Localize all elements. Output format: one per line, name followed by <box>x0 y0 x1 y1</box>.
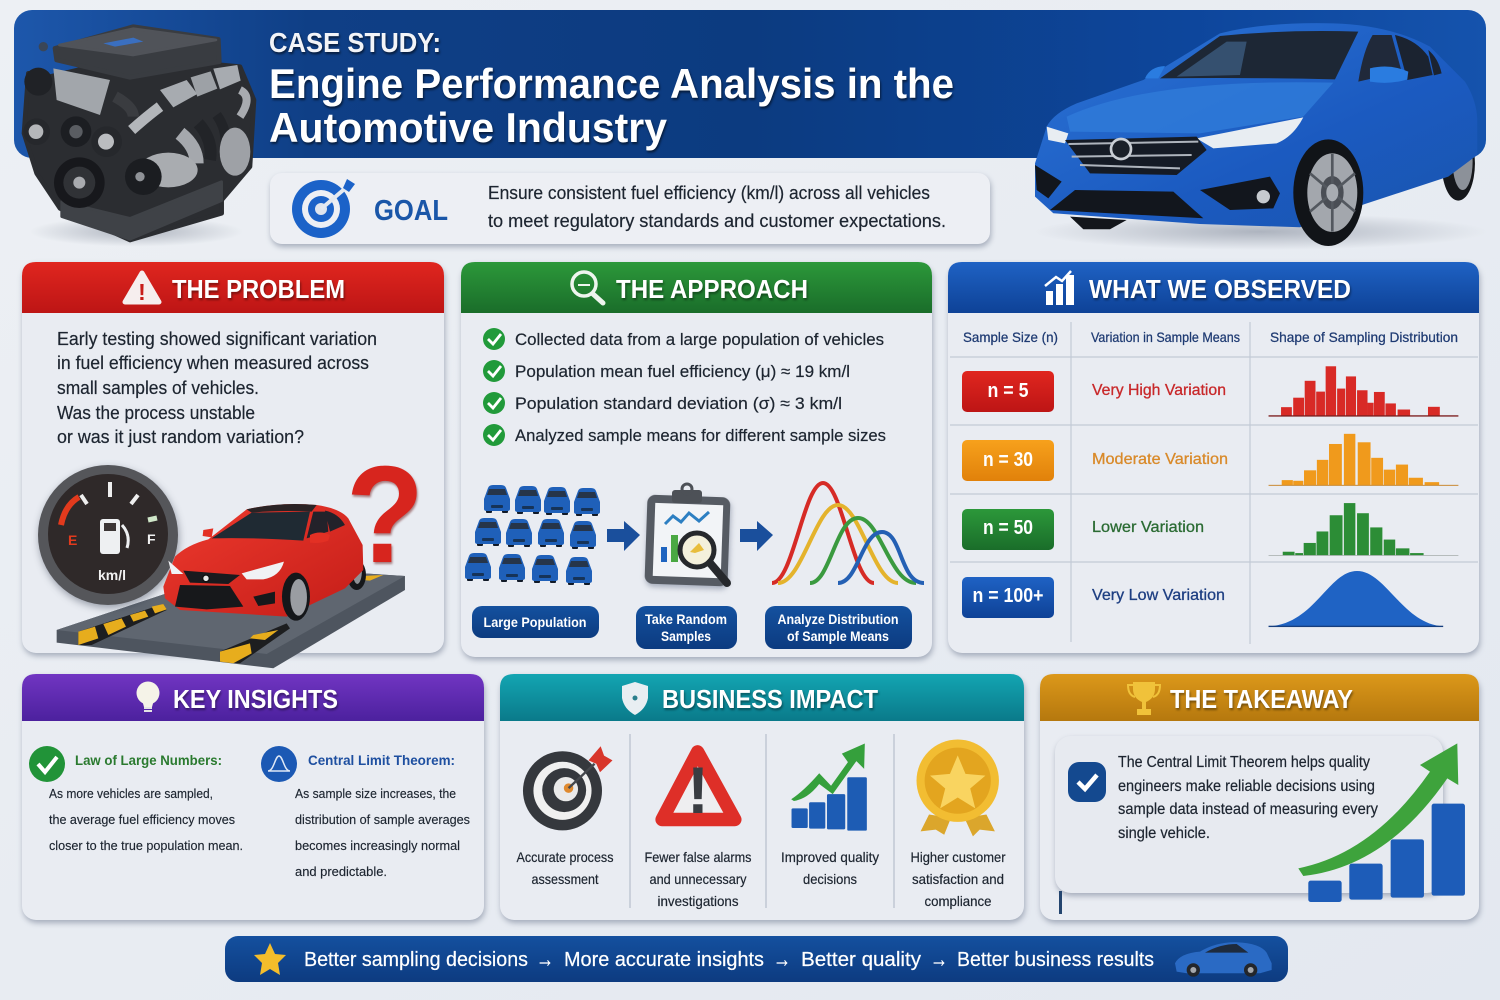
table grid <box>950 322 1478 644</box>
impact: fewer alarms: investigations <box>658 893 738 909</box>
panel: the problem <box>22 262 444 668</box>
footer text: Better quality <box>801 949 921 971</box>
row: n = 5: n = 5 <box>988 380 1028 402</box>
impact: fewer alarms: Fewer false alarms <box>644 849 752 865</box>
impact header bar <box>500 674 1024 721</box>
chart: sample mean curves <box>772 483 924 583</box>
icon: shield <box>622 682 648 715</box>
table column headers: Shape of Sampling Distribution <box>1270 329 1458 345</box>
chart: histogram n = 5 <box>1269 366 1458 417</box>
illustration: test platform <box>57 573 405 668</box>
approach header bar <box>461 262 932 313</box>
approach checklist <box>483 328 886 446</box>
takeaway text: The Central Limit Theorem helps quality <box>1118 754 1370 771</box>
illustration: red car <box>163 504 366 621</box>
row: n = 30: Moderate Variation <box>1092 451 1228 468</box>
footer text: Better sampling decisions <box>304 949 528 971</box>
insight: central limit theorem <box>261 746 470 879</box>
panel: key insights <box>22 674 484 920</box>
insight: central limit theorem: distribution of sample averages <box>295 812 470 827</box>
problem text: Was the process unstable <box>57 403 255 423</box>
step labels: Samples <box>661 628 711 644</box>
approach checklist: Collected data from a large population of vehicles <box>515 330 884 349</box>
insights header bar <box>22 674 484 721</box>
insight: central limit theorem: As sample size increases, the <box>295 786 456 801</box>
table column headers: Sample Size (n) <box>963 329 1058 345</box>
goal box <box>270 173 990 244</box>
impact: fewer alarms: ! <box>687 753 709 827</box>
chart: histogram n = 30 <box>1269 434 1458 486</box>
step labels: Take Random <box>645 611 727 627</box>
title block <box>269 27 954 151</box>
approach checklist: Population mean fuel efficiency (μ) ≈ 19 km/l <box>515 362 850 381</box>
goal text <box>488 183 946 231</box>
icon: goal target <box>292 179 355 238</box>
step labels: of Sample Means <box>787 628 889 644</box>
icon: warning <box>125 273 159 305</box>
row: n = 50: n = 50 <box>983 517 1033 539</box>
row: n = 100+: n = 100+ <box>972 585 1044 607</box>
title block: Automotive Industry <box>269 104 668 151</box>
row: n = 100+ <box>962 577 1225 618</box>
row: n = 100+: Very Low Variation <box>1092 587 1225 604</box>
illustration: vehicle population <box>465 485 600 585</box>
chart: normal curve n = 100+ <box>1269 571 1443 627</box>
impact: quality decisions <box>781 744 879 887</box>
problem header bar <box>22 262 444 313</box>
goal label: GOAL <box>374 195 448 227</box>
insight: central limit theorem: and predictable. <box>295 864 387 879</box>
impact: customer satisfaction: Higher customer <box>910 849 1006 865</box>
problem text: or was it just random variation? <box>57 427 304 447</box>
approach heading: THE APPROACH <box>616 274 808 304</box>
icon: magnifier <box>572 272 603 303</box>
illustration: fuel gauge: km/l <box>98 567 126 583</box>
icon: clipboard <box>644 484 731 586</box>
illustration: blue car <box>1033 23 1487 250</box>
impact: fewer alarms <box>644 752 752 909</box>
icon: lightbulb <box>136 682 160 711</box>
goal text: Ensure consistent fuel efficiency (km/l) across all vehicles <box>488 183 930 203</box>
footer text: → <box>930 946 948 973</box>
icon: question mark: ? <box>346 438 424 592</box>
panel: what we observed <box>948 262 1479 653</box>
icon: chart <box>1045 271 1074 305</box>
observed heading: WHAT WE OBSERVED <box>1089 274 1351 304</box>
icon: trophy <box>1128 682 1160 715</box>
illustration: engine <box>23 27 254 247</box>
approach checklist: Analyzed sample means for different sample sizes <box>515 426 886 445</box>
problem text: Early testing showed significant variation <box>57 329 377 349</box>
title block: CASE STUDY: <box>269 27 441 58</box>
step labels: Analyze Distribution <box>778 611 898 627</box>
impact: accurate assessment <box>516 746 614 887</box>
takeaway inner card <box>1055 736 1443 893</box>
insight: law of large numbers: As more vehicles are sampled, <box>49 786 213 801</box>
problem heading: THE PROBLEM <box>172 274 345 304</box>
illustration: fuel gauge <box>38 465 178 605</box>
impact: customer satisfaction: compliance <box>924 893 992 909</box>
header banner <box>14 10 1486 158</box>
impact: customer satisfaction: satisfaction and <box>912 871 1004 887</box>
insight: central limit theorem: becomes increasingly normal <box>295 838 460 853</box>
takeaway text: single vehicle. <box>1118 825 1210 842</box>
row: n = 5: Very High Variation <box>1092 382 1226 399</box>
step labels <box>472 606 912 649</box>
chart: histogram n = 50 <box>1269 503 1458 556</box>
footer text: → <box>773 946 791 973</box>
footer text <box>304 946 1154 973</box>
step labels: Large Population <box>484 614 586 630</box>
impact: customer satisfaction <box>910 739 1006 909</box>
row: n = 50 <box>962 509 1204 550</box>
table column headers <box>963 329 1458 345</box>
impact: fewer alarms: and unnecessary <box>650 871 746 887</box>
icon: check badge <box>1068 762 1106 802</box>
impact: quality decisions: Improved quality <box>781 849 879 865</box>
takeaway header bar <box>1040 674 1479 721</box>
arrow <box>740 521 773 551</box>
insight: law of large numbers: the average fuel efficiency moves <box>49 812 235 827</box>
icon: warning: ! <box>138 279 146 305</box>
takeaway text: engineers make reliable decisions using <box>1118 778 1375 795</box>
insight: law of large numbers: closer to the true population mean. <box>49 838 243 853</box>
insight: law of large numbers: Law of Large Numbers: <box>75 752 222 768</box>
footer text: → <box>536 946 554 973</box>
problem text <box>57 329 377 447</box>
impact: accurate assessment: assessment <box>532 871 599 887</box>
row: n = 30: n = 30 <box>983 449 1033 471</box>
impact heading: BUSINESS IMPACT <box>662 684 878 714</box>
problem text: in fuel efficiency when measured across <box>57 353 369 373</box>
insight: central limit theorem: Central Limit Theorem: <box>308 752 455 768</box>
impact: accurate assessment: Accurate process <box>516 849 614 865</box>
goal text: to meet regulatory standards and customer expectations. <box>488 211 946 231</box>
impact: quality decisions: decisions <box>803 871 857 887</box>
row: n = 30 <box>962 440 1228 481</box>
panel: the takeaway <box>1040 674 1479 920</box>
row: n = 5 <box>962 371 1226 412</box>
panel: the approach <box>461 262 932 657</box>
illustration: fuel gauge: F <box>147 531 156 547</box>
chart: growth bars and arrow <box>1298 743 1465 902</box>
insight: law of large numbers <box>29 746 243 853</box>
footer text: More accurate insights <box>564 949 764 971</box>
observed header bar <box>948 262 1479 313</box>
takeaway heading: THE TAKEAWAY <box>1170 684 1353 714</box>
table column headers: Variation in Sample Means <box>1091 329 1240 345</box>
arrow <box>607 521 640 551</box>
approach checklist: Population standard deviation (σ) ≈ 3 km/l <box>515 394 842 413</box>
icon: star <box>254 943 286 975</box>
takeaway text <box>1118 754 1378 842</box>
footer text: Better business results <box>957 949 1154 971</box>
problem text: small samples of vehicles. <box>57 378 259 398</box>
panel: business impact <box>500 674 1024 920</box>
illustration: fuel gauge: E <box>68 532 77 548</box>
footer banner <box>225 936 1288 982</box>
column dividers <box>630 734 894 908</box>
row: n = 50: Lower Variation <box>1092 519 1204 536</box>
accent tick <box>1059 891 1062 914</box>
insights heading: KEY INSIGHTS <box>173 684 338 714</box>
takeaway text: sample data instead of measuring every <box>1118 801 1378 818</box>
title block: Engine Performance Analysis in the <box>269 60 954 107</box>
icon: footer car <box>1175 942 1272 977</box>
